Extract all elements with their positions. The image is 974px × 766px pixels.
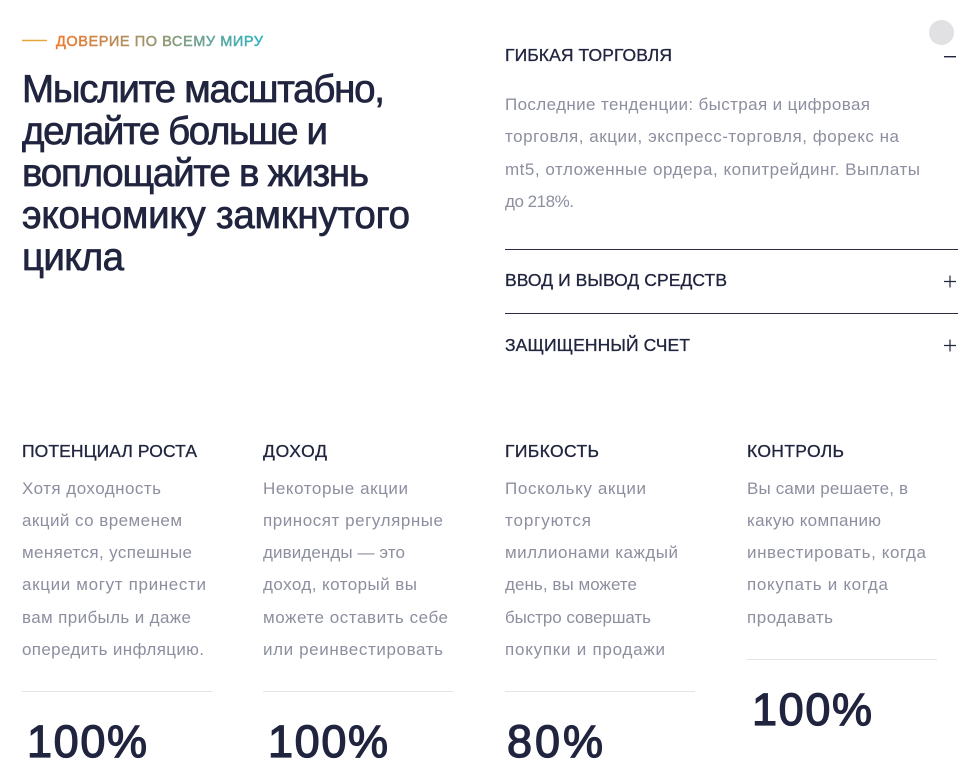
accordion item: protected account — [505, 334, 956, 355]
column: flexibility: миллионами каждый — [505, 543, 678, 562]
column: flexibility: 80% — [507, 716, 603, 766]
main heading: экономику замкнутого — [22, 194, 410, 237]
column: growth potential: Хотя доходность — [22, 479, 161, 498]
column: flexibility: Поскольку акции — [505, 479, 646, 498]
column: control: какую компанию — [747, 511, 881, 530]
accordion item: flexible trading: ГИБКАЯ ТОРГОВЛЯ — [505, 45, 672, 65]
main heading: делайте больше и — [22, 110, 328, 153]
accordion item: deposits and withdrawals — [505, 270, 956, 290]
column: control: продавать — [747, 608, 833, 627]
column: growth potential: ПОТЕНЦИАЛ РОСТА — [22, 441, 197, 461]
decorative grey circle — [929, 20, 954, 45]
accordion item: flexible trading: до 218%. — [505, 192, 574, 211]
column: growth potential: акции могут принести — [22, 575, 206, 594]
column: growth potential — [22, 441, 212, 766]
column: control: покупать и когда — [747, 575, 889, 594]
eyebrow: trust worldwide: ДОВЕРИЕ ПО ВСЕМУ МИРУ — [56, 34, 264, 50]
column: flexibility: покупки и продажи — [505, 640, 665, 659]
column: flexibility: день, вы можете — [505, 575, 637, 594]
main heading: цикла — [22, 236, 125, 279]
main heading: Мыслите масштабно, — [22, 68, 385, 111]
column: control: 100% — [752, 684, 872, 735]
main heading: воплощайте в жизнь — [22, 152, 369, 195]
column: income: или реинвестировать — [263, 640, 443, 659]
column: income: приносят регулярные — [263, 511, 443, 530]
column: growth potential: акций со временем — [22, 511, 182, 530]
column: control — [747, 441, 937, 735]
column: income: 100% — [268, 716, 388, 766]
column: flexibility: торгуются — [505, 511, 591, 530]
column: income — [263, 441, 453, 766]
column: control: инвестировать, когда — [747, 543, 927, 562]
column: flexibility — [505, 441, 695, 766]
accordion item: deposits and withdrawals: ВВОД И ВЫВОД СРЕДСТВ — [505, 270, 727, 290]
accordion item: flexible trading: торговля, акции, экспресс-торговля, форекс на — [505, 127, 900, 146]
column: growth potential: 100% — [27, 716, 147, 766]
column: income: дивиденды — это — [263, 543, 405, 562]
column: income: можете оставить себе — [263, 608, 448, 627]
column: flexibility: ГИБКОСТЬ — [505, 441, 599, 461]
accordion item: flexible trading — [505, 45, 956, 211]
column: growth potential: меняется, успешные — [22, 543, 192, 562]
main heading — [22, 68, 410, 279]
column: income: ДОХОД — [263, 441, 327, 461]
accordion item: flexible trading: Последние тенденции: быстрая и цифровая — [505, 95, 870, 114]
column: flexibility: быстро совершать — [505, 608, 651, 627]
accordion item: protected account: ЗАЩИЩЕННЫЙ СЧЕТ — [505, 334, 690, 355]
column: income: Некоторые акции — [263, 479, 408, 498]
column: income: доход, который вы — [263, 575, 417, 594]
column: control: Вы сами решаете, в — [747, 479, 908, 498]
column: growth potential: вам прибыль и даже — [22, 608, 191, 627]
column: growth potential: опередить инфляцию. — [22, 640, 204, 659]
accordion item: flexible trading: mt5, отложенные ордера, копитрейдинг. Выплаты — [505, 160, 920, 179]
column: control: КОНТРОЛЬ — [747, 441, 844, 461]
